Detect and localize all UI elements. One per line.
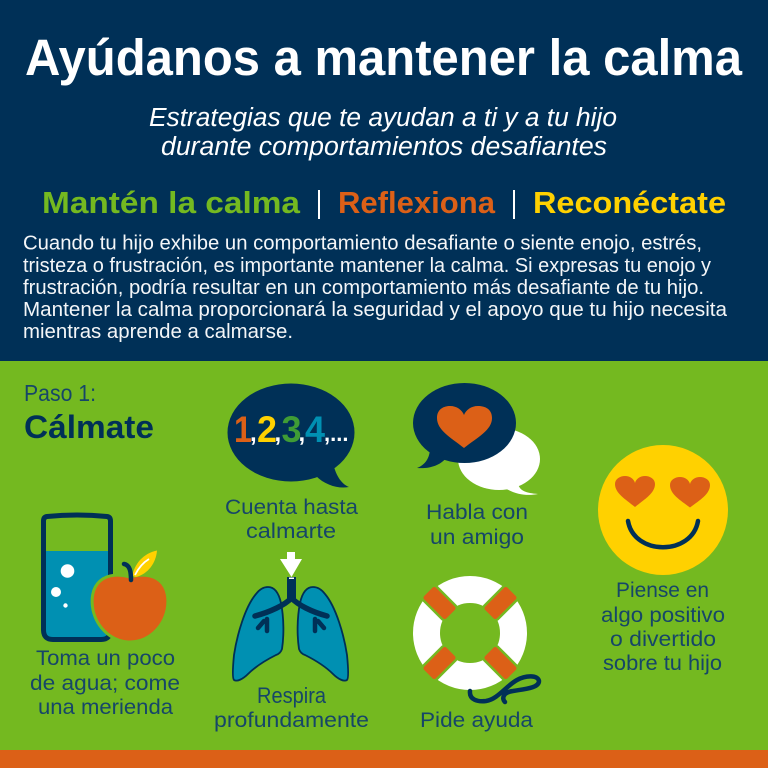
label: count: Cuenta hasta [225, 496, 358, 519]
label: positive thought: Piense en [616, 579, 709, 602]
intro text block: tristeza o frustración, es importante mantener la calma. Si expresas tu enojo y [23, 255, 711, 277]
step heading: Paso 1: [24, 380, 96, 406]
step heading: Cálmate [24, 409, 154, 445]
label: breathe: profundamente [214, 709, 369, 732]
label: positive thought: sobre tu hijo [603, 652, 722, 675]
icon: water glass and apple [44, 515, 168, 642]
step heading [24, 380, 154, 445]
label: water and snack: de agua; come [30, 672, 180, 695]
heading: three strategies: Reconéctate [533, 185, 726, 220]
label: friend: un amigo [430, 526, 524, 549]
heading: three strategies [42, 185, 726, 220]
icon: counting speech bubble: 2 [257, 409, 277, 450]
icon: smiley with heart eyes [598, 445, 728, 575]
panel: navy header [0, 0, 768, 361]
heading: three strategies: Reflexiona [338, 185, 496, 220]
intro text block: Mantener la calma proporcionará la seguridad y el apoyo que tu hijo necesita [23, 299, 728, 321]
heading: three strategies: Mantén la calma [42, 185, 301, 220]
label: water and snack [30, 647, 180, 719]
subtitle: durante comportamientos desafiantes [161, 133, 607, 161]
subtitle [149, 104, 617, 161]
label: friend [426, 501, 528, 549]
icon: counting speech bubble: 3 [282, 409, 302, 450]
label: friend: Habla con [426, 501, 528, 524]
panel: green background [0, 361, 768, 750]
orange footer band [0, 750, 768, 768]
title: Ayúdanos a mantener la calma [25, 29, 743, 86]
label: breathe: Respira [257, 683, 327, 708]
label: water and snack: una merienda [38, 696, 173, 719]
intro text block: Cuando tu hijo exhibe un comportamiento desafiante o siente enojo, estrés, [23, 232, 702, 254]
label: count [225, 496, 358, 543]
icon: counting speech bubble: ,... [324, 421, 348, 446]
icon: counting speech bubble: 1 [234, 409, 252, 450]
label: positive thought: algo positivo [601, 604, 725, 627]
label: water and snack: Toma un poco [36, 647, 175, 670]
intro text block: mientras aprende a calmarse. [23, 321, 293, 343]
icon: speech bubbles with heart [413, 383, 540, 495]
icon: counting speech bubble: , [250, 420, 257, 447]
label: ask for help: Pide ayuda [420, 709, 533, 732]
label: breathe [214, 683, 369, 732]
icon: counting speech bubble [228, 384, 354, 488]
subtitle: Estrategias que te ayudan a ti y a tu hijo [149, 104, 617, 132]
icon: life ring with rope [421, 584, 539, 702]
icon: counting speech bubble: 4 [305, 409, 325, 450]
icon: lungs with breath arrow [233, 552, 348, 681]
label: positive thought: o divertido [610, 628, 716, 651]
label: positive thought [601, 579, 725, 675]
label: count: calmarte [246, 520, 336, 543]
intro text block: frustración, podría resultar en un comportamiento más desafiante de tu hijo. [23, 277, 704, 299]
intro text block [23, 232, 728, 343]
icon: counting speech bubble: , [298, 420, 305, 447]
icon: counting speech bubble: , [274, 420, 281, 447]
